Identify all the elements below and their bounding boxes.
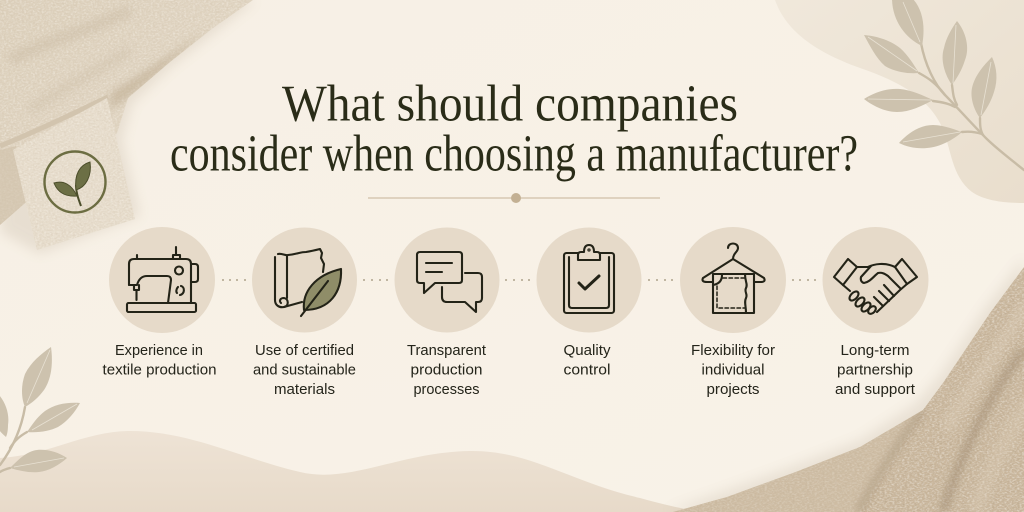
title: consider when choosing a manufacturer? (170, 126, 858, 182)
decorative blob: top right (775, 0, 1024, 203)
label: partnership (837, 362, 913, 378)
label: Long-term (840, 343, 910, 359)
step 2: certified and sustainable materials (252, 228, 357, 398)
label: projects (706, 382, 760, 398)
label: and sustainable (253, 362, 356, 378)
title divider (368, 193, 660, 203)
leaf branch: top right (864, 0, 1024, 170)
step 3: transparent production processes (394, 228, 500, 398)
tag emblem: leaf in circle (44, 152, 106, 212)
icon: sewing machine (127, 247, 198, 312)
label: Transparent (407, 343, 486, 359)
fabric: bottom right knit (665, 258, 1024, 512)
label: processes (414, 382, 480, 398)
label: Quality (564, 343, 611, 359)
icon: speech bubbles (417, 252, 482, 312)
woven tag (13, 98, 135, 250)
step 6: long-term partnership and support (822, 227, 928, 398)
title (170, 76, 858, 182)
label: materials (274, 382, 335, 398)
step 4: quality control (536, 228, 642, 378)
icon: hanger with fabric (702, 244, 765, 313)
label: Flexibility for (691, 343, 775, 359)
label: individual (702, 362, 764, 378)
label: Experience in (115, 343, 203, 359)
connector dots (222, 279, 816, 281)
label (102, 343, 216, 378)
label (564, 343, 611, 378)
label (691, 343, 775, 398)
icon: fabric roll with leaf (275, 249, 341, 316)
label: production (410, 362, 482, 378)
label (253, 343, 356, 398)
label: and support (835, 382, 915, 398)
leaf branch: bottom left (0, 347, 80, 472)
step 1: experience in textile production (102, 227, 216, 378)
decorative wave: bottom (0, 431, 700, 512)
label: Use of certified (255, 343, 354, 359)
label: control (564, 362, 610, 378)
label (835, 343, 915, 398)
fabric: top left with tag (0, 0, 256, 254)
label (407, 343, 486, 398)
icon: handshake (834, 259, 917, 315)
label: textile production (102, 362, 216, 378)
icon: clipboard with check (564, 245, 614, 313)
title: What should companies (282, 76, 738, 132)
step 5: flexibility for individual projects (680, 227, 786, 398)
